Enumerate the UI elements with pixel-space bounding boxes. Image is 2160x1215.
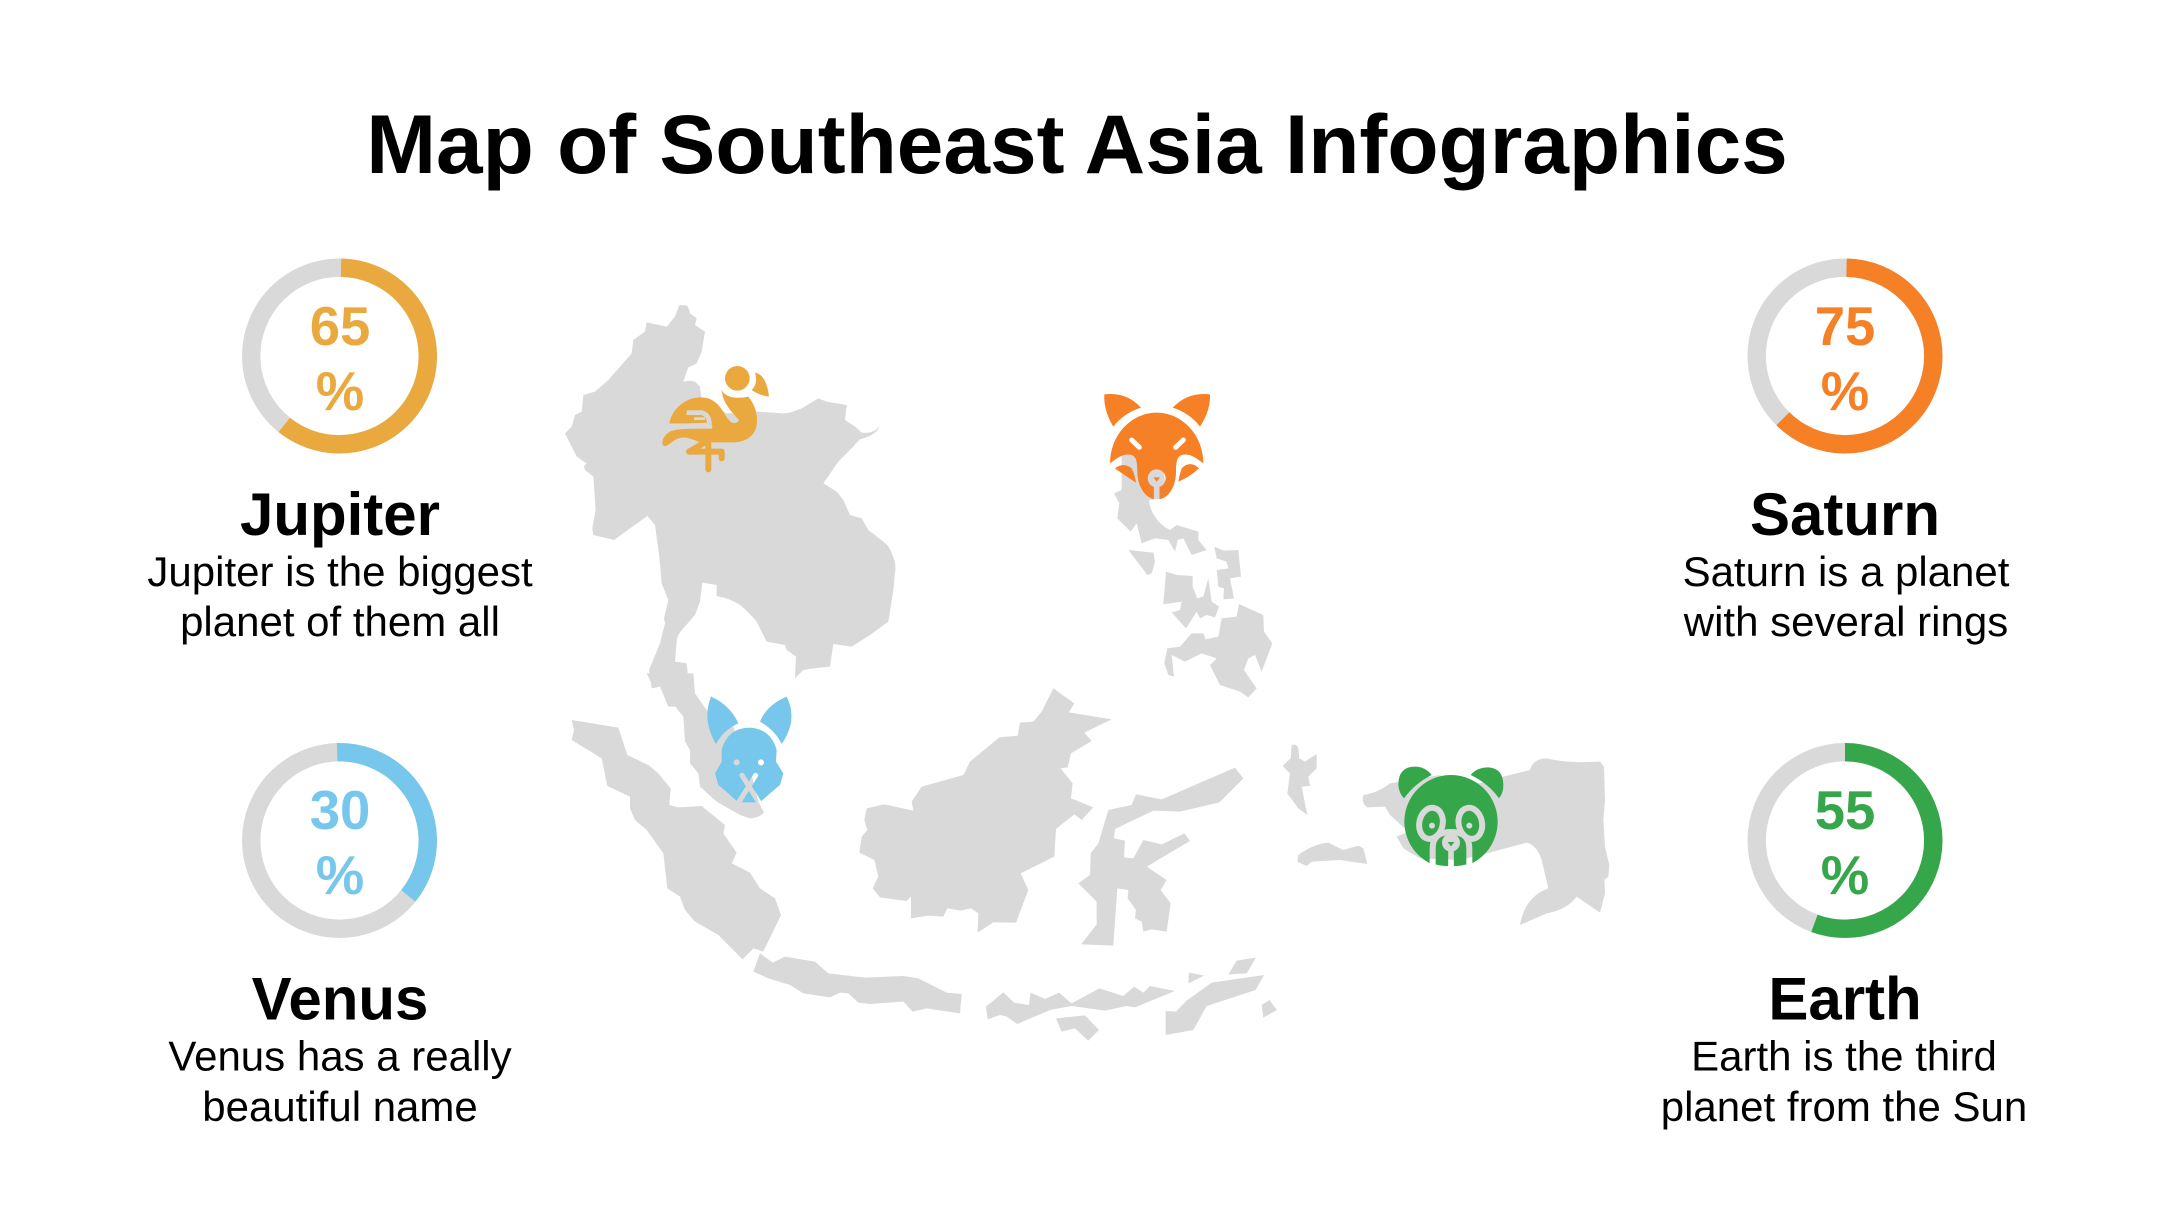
icon: rabbit xyxy=(707,697,791,802)
map: Philippines xyxy=(1114,453,1272,697)
description: Jupiter: Jupiter is the biggest xyxy=(147,548,533,595)
heading: Jupiter: Jupiter xyxy=(240,481,440,548)
map of Southeast Asia xyxy=(565,305,1609,1041)
value: 55%: % xyxy=(1821,845,1869,906)
value: 30%: 30 xyxy=(310,780,370,841)
icon: fox xyxy=(1104,394,1210,499)
description: Earth: planet from the Sun xyxy=(1661,1083,2027,1130)
title: Map of Southeast Asia Infographics xyxy=(366,97,1788,191)
description: Venus: beautiful name xyxy=(202,1083,478,1130)
map: Borneo, Sulawesi and Lesser Sunda Islands xyxy=(859,688,1317,1041)
heading: Saturn: Saturn xyxy=(1750,481,1940,548)
description: Earth: Earth is the third xyxy=(1691,1032,1997,1080)
map: Papua and Seram xyxy=(1297,758,1609,925)
donut chart: Venus 30% xyxy=(249,750,430,931)
description: Jupiter: planet of them all xyxy=(180,598,500,645)
donut chart: Earth 55% xyxy=(1757,752,1933,929)
panel: Venus xyxy=(168,750,512,1130)
panel: Jupiter xyxy=(147,266,533,645)
value: 65%: 65 xyxy=(310,296,370,357)
map: mainland Southeast Asia xyxy=(565,305,895,707)
description: Saturn: Saturn is a planet xyxy=(1683,548,2010,595)
description: Venus: Venus has a really xyxy=(168,1032,512,1080)
icon: flamingo xyxy=(662,366,769,469)
icon: panda xyxy=(1398,767,1503,866)
heading: Earth: Earth xyxy=(1768,966,1922,1032)
value: 65%: % xyxy=(316,361,364,422)
heading: Venus: Venus xyxy=(252,966,428,1032)
map: Malay Peninsula, Sumatra and Java xyxy=(572,673,962,1013)
value: 75%: % xyxy=(1821,361,1869,422)
value: 75%: 75 xyxy=(1815,296,1875,357)
value: 55%: 55 xyxy=(1815,780,1875,841)
panel: Earth xyxy=(1661,752,2027,1130)
donut chart: Saturn 75% xyxy=(1755,266,1935,446)
value: 30%: % xyxy=(316,845,364,906)
panel: Saturn xyxy=(1683,266,2010,645)
donut chart: Jupiter 65% xyxy=(250,266,429,446)
description: Saturn: with several rings xyxy=(1683,598,2008,645)
